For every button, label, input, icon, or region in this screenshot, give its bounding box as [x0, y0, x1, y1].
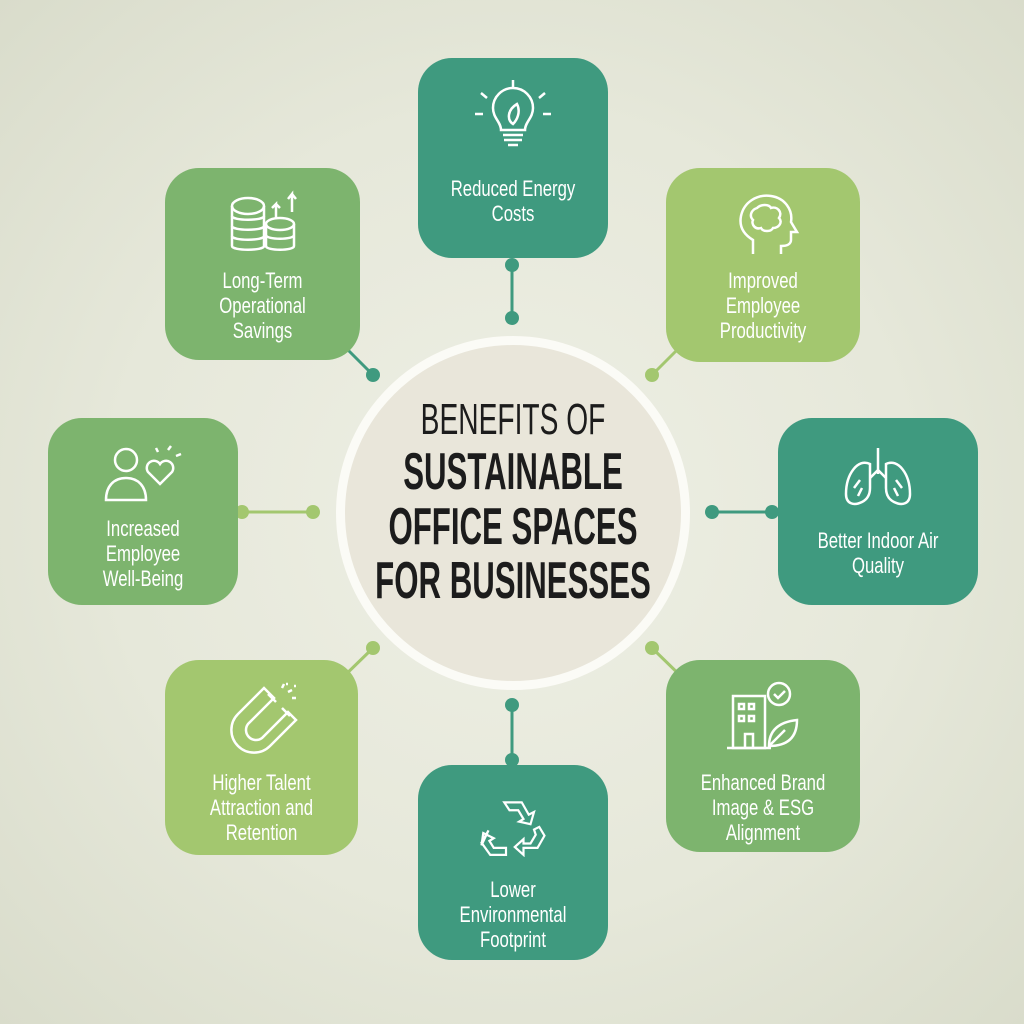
card: higher talent attraction: Attraction and	[210, 795, 313, 820]
title: OFFICE SPACES	[388, 498, 638, 556]
icon: person with heart	[104, 445, 182, 502]
icon: coins	[230, 190, 297, 251]
icon: magnet	[230, 682, 298, 754]
card: higher talent attraction: Retention	[226, 820, 297, 845]
card: lower environmental footprint: Environmental	[460, 902, 566, 927]
card: improved employee productivity	[666, 168, 860, 362]
card: reduced energy costs: Reduced Energy	[451, 176, 575, 201]
title	[375, 395, 651, 610]
card: better indoor air quality: Better Indoor Air	[818, 528, 938, 553]
title: SUSTAINABLE	[403, 443, 623, 501]
card: enhanced brand image: Alignment	[726, 820, 800, 845]
card: enhanced brand image: Enhanced Brand	[701, 770, 825, 795]
card: increased employee well-being: Well-Being	[103, 566, 183, 591]
card: lower environmental footprint: Lower	[490, 877, 536, 902]
card: enhanced brand image	[666, 660, 860, 852]
central title circle	[336, 336, 690, 690]
card: increased employee well-being: Increased	[106, 516, 180, 541]
icon: recycle	[480, 801, 546, 857]
card: increased employee well-being: Employee	[106, 541, 180, 566]
title: FOR BUSINESSES	[375, 552, 651, 610]
title: BENEFITS OF	[421, 395, 605, 444]
icon: building with leaf and check	[727, 682, 798, 750]
card: lower environmental footprint: Footprint	[480, 927, 546, 952]
card: long-term operational savings	[165, 168, 360, 360]
card: lower environmental footprint	[418, 765, 608, 960]
icon: lungs	[844, 448, 912, 506]
icon: lightbulb	[475, 80, 551, 146]
icon: head with brain	[739, 194, 800, 254]
card: long-term operational savings: Savings	[233, 318, 292, 343]
card: better indoor air quality: Quality	[852, 553, 904, 578]
card: increased employee well-being	[48, 418, 238, 605]
card: reduced energy costs: Costs	[492, 201, 534, 226]
card: improved employee productivity: Employee	[726, 293, 800, 318]
card: improved employee productivity: Improved	[728, 268, 798, 293]
card: better indoor air quality	[778, 418, 978, 605]
card: higher talent attraction	[165, 660, 358, 855]
card: long-term operational savings: Long-Term	[223, 268, 302, 293]
card: higher talent attraction: Higher Talent	[212, 770, 311, 795]
card: reduced energy costs	[418, 58, 608, 258]
card: long-term operational savings: Operational	[219, 293, 306, 318]
card: enhanced brand image: Image & ESG	[712, 795, 814, 820]
card: improved employee productivity: Productivity	[720, 318, 806, 343]
